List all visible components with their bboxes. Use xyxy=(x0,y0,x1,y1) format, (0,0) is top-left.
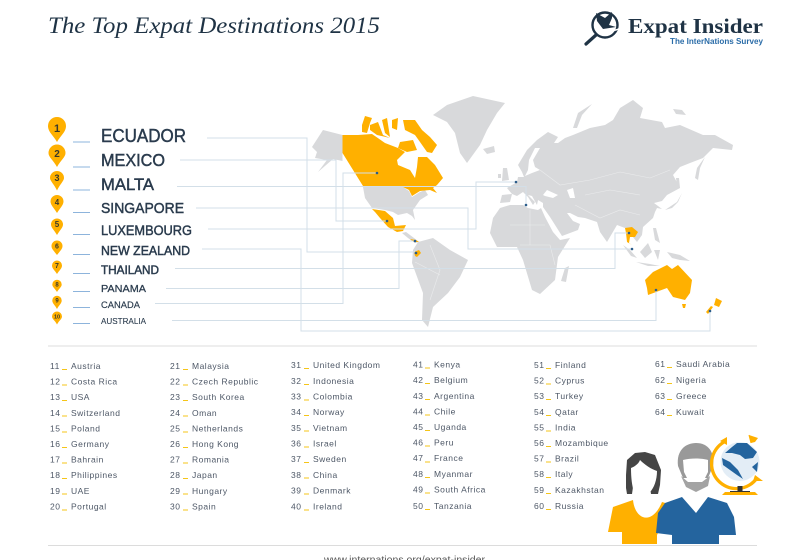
list column: ranks 31-40: 36 xyxy=(291,438,301,448)
list column: ranks 41-50: Uganda xyxy=(434,422,467,432)
list column: ranks 31-40: 37 xyxy=(291,454,301,464)
Panama xyxy=(410,239,419,242)
list column: ranks 51-60: Finland xyxy=(555,360,586,370)
list column: ranks 51-60: 53 xyxy=(534,391,544,401)
list column: ranks 11-20: 14 xyxy=(50,408,60,418)
list column: ranks 21-30: 23 xyxy=(170,392,180,402)
rank 2: Mexico xyxy=(48,144,165,170)
list column: ranks 31-40: Colombia xyxy=(313,392,353,402)
list column: ranks 21-30: 21 xyxy=(170,361,180,371)
list column: ranks 41-50: 45 xyxy=(413,422,423,432)
logo: Expat Insider xyxy=(586,12,763,46)
list column: ranks 31-40: 39 xyxy=(291,486,301,496)
Mexico xyxy=(372,209,406,232)
title: The Top Expat Destinations 2015 xyxy=(48,13,380,39)
rank 9: Canada xyxy=(52,296,141,311)
list column: ranks 11-20: Austria xyxy=(71,361,101,371)
rank 6: New Zealand: NEW ZEALAND xyxy=(101,244,190,258)
list column: ranks 51-60: Italy xyxy=(555,469,573,479)
rank 6: New Zealand xyxy=(52,241,190,258)
list column: ranks 11-20: 16 xyxy=(50,439,60,449)
list column: ranks 61-64: 64 xyxy=(655,407,665,417)
rank 2: Mexico: MEXICO xyxy=(101,150,165,170)
list column: ranks 21-30 xyxy=(170,361,259,511)
list column: ranks 11-20: UAE xyxy=(71,486,90,496)
Thailand xyxy=(625,227,638,245)
list column: ranks 41-50: 42 xyxy=(413,375,423,385)
list column: ranks 51-60: Qatar xyxy=(555,407,579,417)
list column: ranks 41-50: 50 xyxy=(413,501,423,511)
list column: ranks 41-50: Belgium xyxy=(434,375,468,385)
list column: ranks 61-64: 61 xyxy=(655,359,665,369)
list column: ranks 41-50 xyxy=(413,360,486,511)
list column: ranks 61-64: Greece xyxy=(676,391,707,401)
list column: ranks 21-30: Japan xyxy=(192,470,218,480)
list column: ranks 51-60: 59 xyxy=(534,485,544,495)
rank 8: Panama: PANAMA xyxy=(101,283,146,295)
list column: ranks 11-20 xyxy=(50,361,120,511)
list column: ranks 41-50: 41 xyxy=(413,360,423,370)
list column: ranks 31-40: 32 xyxy=(291,376,301,386)
list column: ranks 51-60: Russia xyxy=(555,501,584,511)
Canada xyxy=(342,116,443,196)
list column: ranks 51-60: Brazil xyxy=(555,454,579,464)
list column: ranks 11-20: 20 xyxy=(50,501,60,511)
rank 9: Canada: 9 xyxy=(55,298,59,304)
man xyxy=(656,443,736,544)
list column: ranks 51-60: 58 xyxy=(534,469,544,479)
list column: ranks 61-64: Saudi Arabia xyxy=(676,359,730,369)
list column: ranks 31-40: 35 xyxy=(291,423,301,433)
list column: ranks 11-20: 13 xyxy=(50,392,60,402)
rank 5: Luxembourg: 5 xyxy=(55,220,60,229)
list column: ranks 21-30: Hong Kong xyxy=(192,439,239,449)
destination dots xyxy=(376,172,711,312)
divider top xyxy=(48,345,757,347)
rank 7: Thailand xyxy=(52,260,159,277)
list column: ranks 31-40: Israel xyxy=(313,438,337,448)
list column: ranks 51-60: Turkey xyxy=(555,391,584,401)
list column: ranks 31-40: Vietnam xyxy=(313,423,348,433)
list column: ranks 11-20: 15 xyxy=(50,423,60,433)
list column: ranks 11-20: 18 xyxy=(50,470,60,480)
list column: ranks 51-60: 51 xyxy=(534,360,544,370)
gray land masses xyxy=(312,96,733,327)
rank 4: Singapore xyxy=(50,195,184,217)
list column: ranks 11-20: USA xyxy=(71,392,90,402)
list column: ranks 31-40: Norway xyxy=(313,407,345,417)
woman xyxy=(608,452,672,544)
list column: ranks 21-30: 24 xyxy=(170,408,180,418)
list column: ranks 41-50: Kenya xyxy=(434,360,461,370)
list column: ranks 11-20: 17 xyxy=(50,455,60,465)
list column: ranks 41-50: Argentina xyxy=(434,391,475,401)
list column: ranks 11-20: 19 xyxy=(50,486,60,496)
list column: ranks 61-64 xyxy=(655,359,730,417)
list column: ranks 21-30: 22 xyxy=(170,377,180,387)
list column: ranks 51-60: 55 xyxy=(534,422,544,432)
rank 7: Thailand: 7 xyxy=(55,263,59,270)
list column: ranks 21-30: Hungary xyxy=(192,486,228,496)
list column: ranks 41-50: 48 xyxy=(413,469,423,479)
list column: ranks 31-40: Ireland xyxy=(313,501,342,511)
rank 9: Canada: CANADA xyxy=(101,300,141,311)
Tasmania xyxy=(682,304,686,308)
divider bottom xyxy=(48,544,757,546)
rank 1: Ecuador: 1 xyxy=(54,123,60,135)
list column: ranks 11-20: Philippines xyxy=(71,470,118,480)
list column: ranks 61-64: 63 xyxy=(655,391,665,401)
list column: ranks 51-60: 52 xyxy=(534,376,544,386)
list column: ranks 21-30: 28 xyxy=(170,470,180,480)
inland seas and borders xyxy=(415,148,670,300)
globe xyxy=(712,435,763,495)
list column: ranks 11-20: 11 xyxy=(50,361,60,371)
list column: ranks 31-40: 31 xyxy=(291,360,301,370)
list column: ranks 21-30: Malaysia xyxy=(192,361,230,371)
list column: ranks 11-20: Germany xyxy=(71,439,110,449)
Ecuador xyxy=(414,250,421,257)
rank 3: Malta: 3 xyxy=(54,173,60,183)
logo tagline: The InterNations Survey xyxy=(670,36,763,46)
list column: ranks 51-60: 57 xyxy=(534,454,544,464)
list column: ranks 41-50: 49 xyxy=(413,484,423,494)
rank 10: Australia: 10 xyxy=(54,314,60,320)
logo wordmark: Expat Insider xyxy=(628,14,763,38)
list column: ranks 31-40: Indonesia xyxy=(313,376,354,386)
list column: ranks 41-50: 43 xyxy=(413,391,423,401)
list column: ranks 21-30: 26 xyxy=(170,439,180,449)
rank 3: Malta xyxy=(50,171,154,194)
rank 8: Panama xyxy=(52,280,146,295)
list column: ranks 51-60: 56 xyxy=(534,438,544,448)
list column: ranks 41-50: South Africa xyxy=(434,484,486,494)
list column: ranks 31-40: 34 xyxy=(291,407,301,417)
list column: ranks 11-20: Poland xyxy=(71,423,100,433)
leader lines xyxy=(155,138,710,331)
list column: ranks 11-20: Costa Rica xyxy=(71,377,118,387)
list column: ranks 11-20: 12 xyxy=(50,377,60,387)
list column: ranks 31-40: United Kingdom xyxy=(313,360,380,370)
rank 6: New Zealand: 6 xyxy=(55,244,59,250)
rank 2: Mexico: 2 xyxy=(54,149,60,160)
list column: ranks 61-64: 62 xyxy=(655,375,665,385)
list column: ranks 11-20: Switzerland xyxy=(71,408,120,418)
illustration: two expats and globe xyxy=(608,435,763,544)
list column: ranks 41-50: France xyxy=(434,453,463,463)
list column: ranks 21-30: 27 xyxy=(170,455,180,465)
rank 7: Thailand: THAILAND xyxy=(101,265,159,277)
rank 8: Panama: 8 xyxy=(55,282,59,288)
icon: magnifier with bird xyxy=(586,12,621,44)
list column: ranks 51-60: Cyprus xyxy=(555,376,585,386)
list column: ranks 41-50: Myanmar xyxy=(434,469,473,479)
list column: ranks 31-40: 38 xyxy=(291,470,301,480)
list column: ranks 21-30: Romania xyxy=(192,455,230,465)
list column: ranks 51-60: Mozambique xyxy=(555,438,609,448)
world map xyxy=(312,96,733,327)
list column: ranks 21-30: South Korea xyxy=(192,392,245,402)
list column: ranks 51-60: 54 xyxy=(534,407,544,417)
top ten ranking xyxy=(48,117,192,326)
rank 1: Ecuador: ECUADOR xyxy=(101,125,186,146)
list column: ranks 21-30: 25 xyxy=(170,423,180,433)
rank 10: Australia: AUSTRALIA xyxy=(101,316,146,326)
list column: ranks 41-50: Chile xyxy=(434,406,456,416)
list column: ranks 41-50: 44 xyxy=(413,406,423,416)
list column: ranks 51-60 xyxy=(534,360,609,511)
rank 4: Singapore: 4 xyxy=(55,198,60,207)
rank 5: Luxembourg xyxy=(51,218,192,238)
rank 10: Australia xyxy=(52,312,146,326)
list column: ranks 51-60: Kazakhstan xyxy=(555,485,604,495)
list column: ranks 51-60: India xyxy=(555,422,576,432)
list column: ranks 61-64: Kuwait xyxy=(676,407,705,417)
list column: ranks 51-60: 60 xyxy=(534,501,544,511)
list column: ranks 31-40 xyxy=(291,360,380,511)
rank 4: Singapore: SINGAPORE xyxy=(101,200,184,217)
list column: ranks 11-20: Portugal xyxy=(71,501,107,511)
rank 3: Malta: MALTA xyxy=(101,176,154,194)
list column: ranks 41-50: Tanzania xyxy=(434,501,472,511)
list column: ranks 41-50: 46 xyxy=(413,438,423,448)
list column: ranks 21-30: Oman xyxy=(192,408,217,418)
New Zealand xyxy=(706,298,722,314)
list column: ranks 21-30: 30 xyxy=(170,501,180,511)
rank 1: Ecuador xyxy=(48,117,186,146)
list column: ranks 31-40: China xyxy=(313,470,338,480)
list column: ranks 11-20: Bahrain xyxy=(71,455,104,465)
rank 5: Luxembourg: LUXEMBOURG xyxy=(101,223,192,238)
Australia xyxy=(645,265,692,300)
list column: ranks 41-50: Peru xyxy=(434,438,454,448)
list column: ranks 21-30: Netherlands xyxy=(192,423,243,433)
list column: ranks 41-50: 47 xyxy=(413,453,423,463)
list column: ranks 61-64: Nigeria xyxy=(676,375,706,385)
list column: ranks 31-40: Sweden xyxy=(313,454,347,464)
list column: ranks 21-30: 29 xyxy=(170,486,180,496)
list column: ranks 21-30: Spain xyxy=(192,501,216,511)
list column: ranks 31-40: 33 xyxy=(291,392,301,402)
list column: ranks 31-40: Denmark xyxy=(313,486,351,496)
list column: ranks 21-30: Czech Republic xyxy=(192,377,259,387)
list column: ranks 31-40: 40 xyxy=(291,501,301,511)
